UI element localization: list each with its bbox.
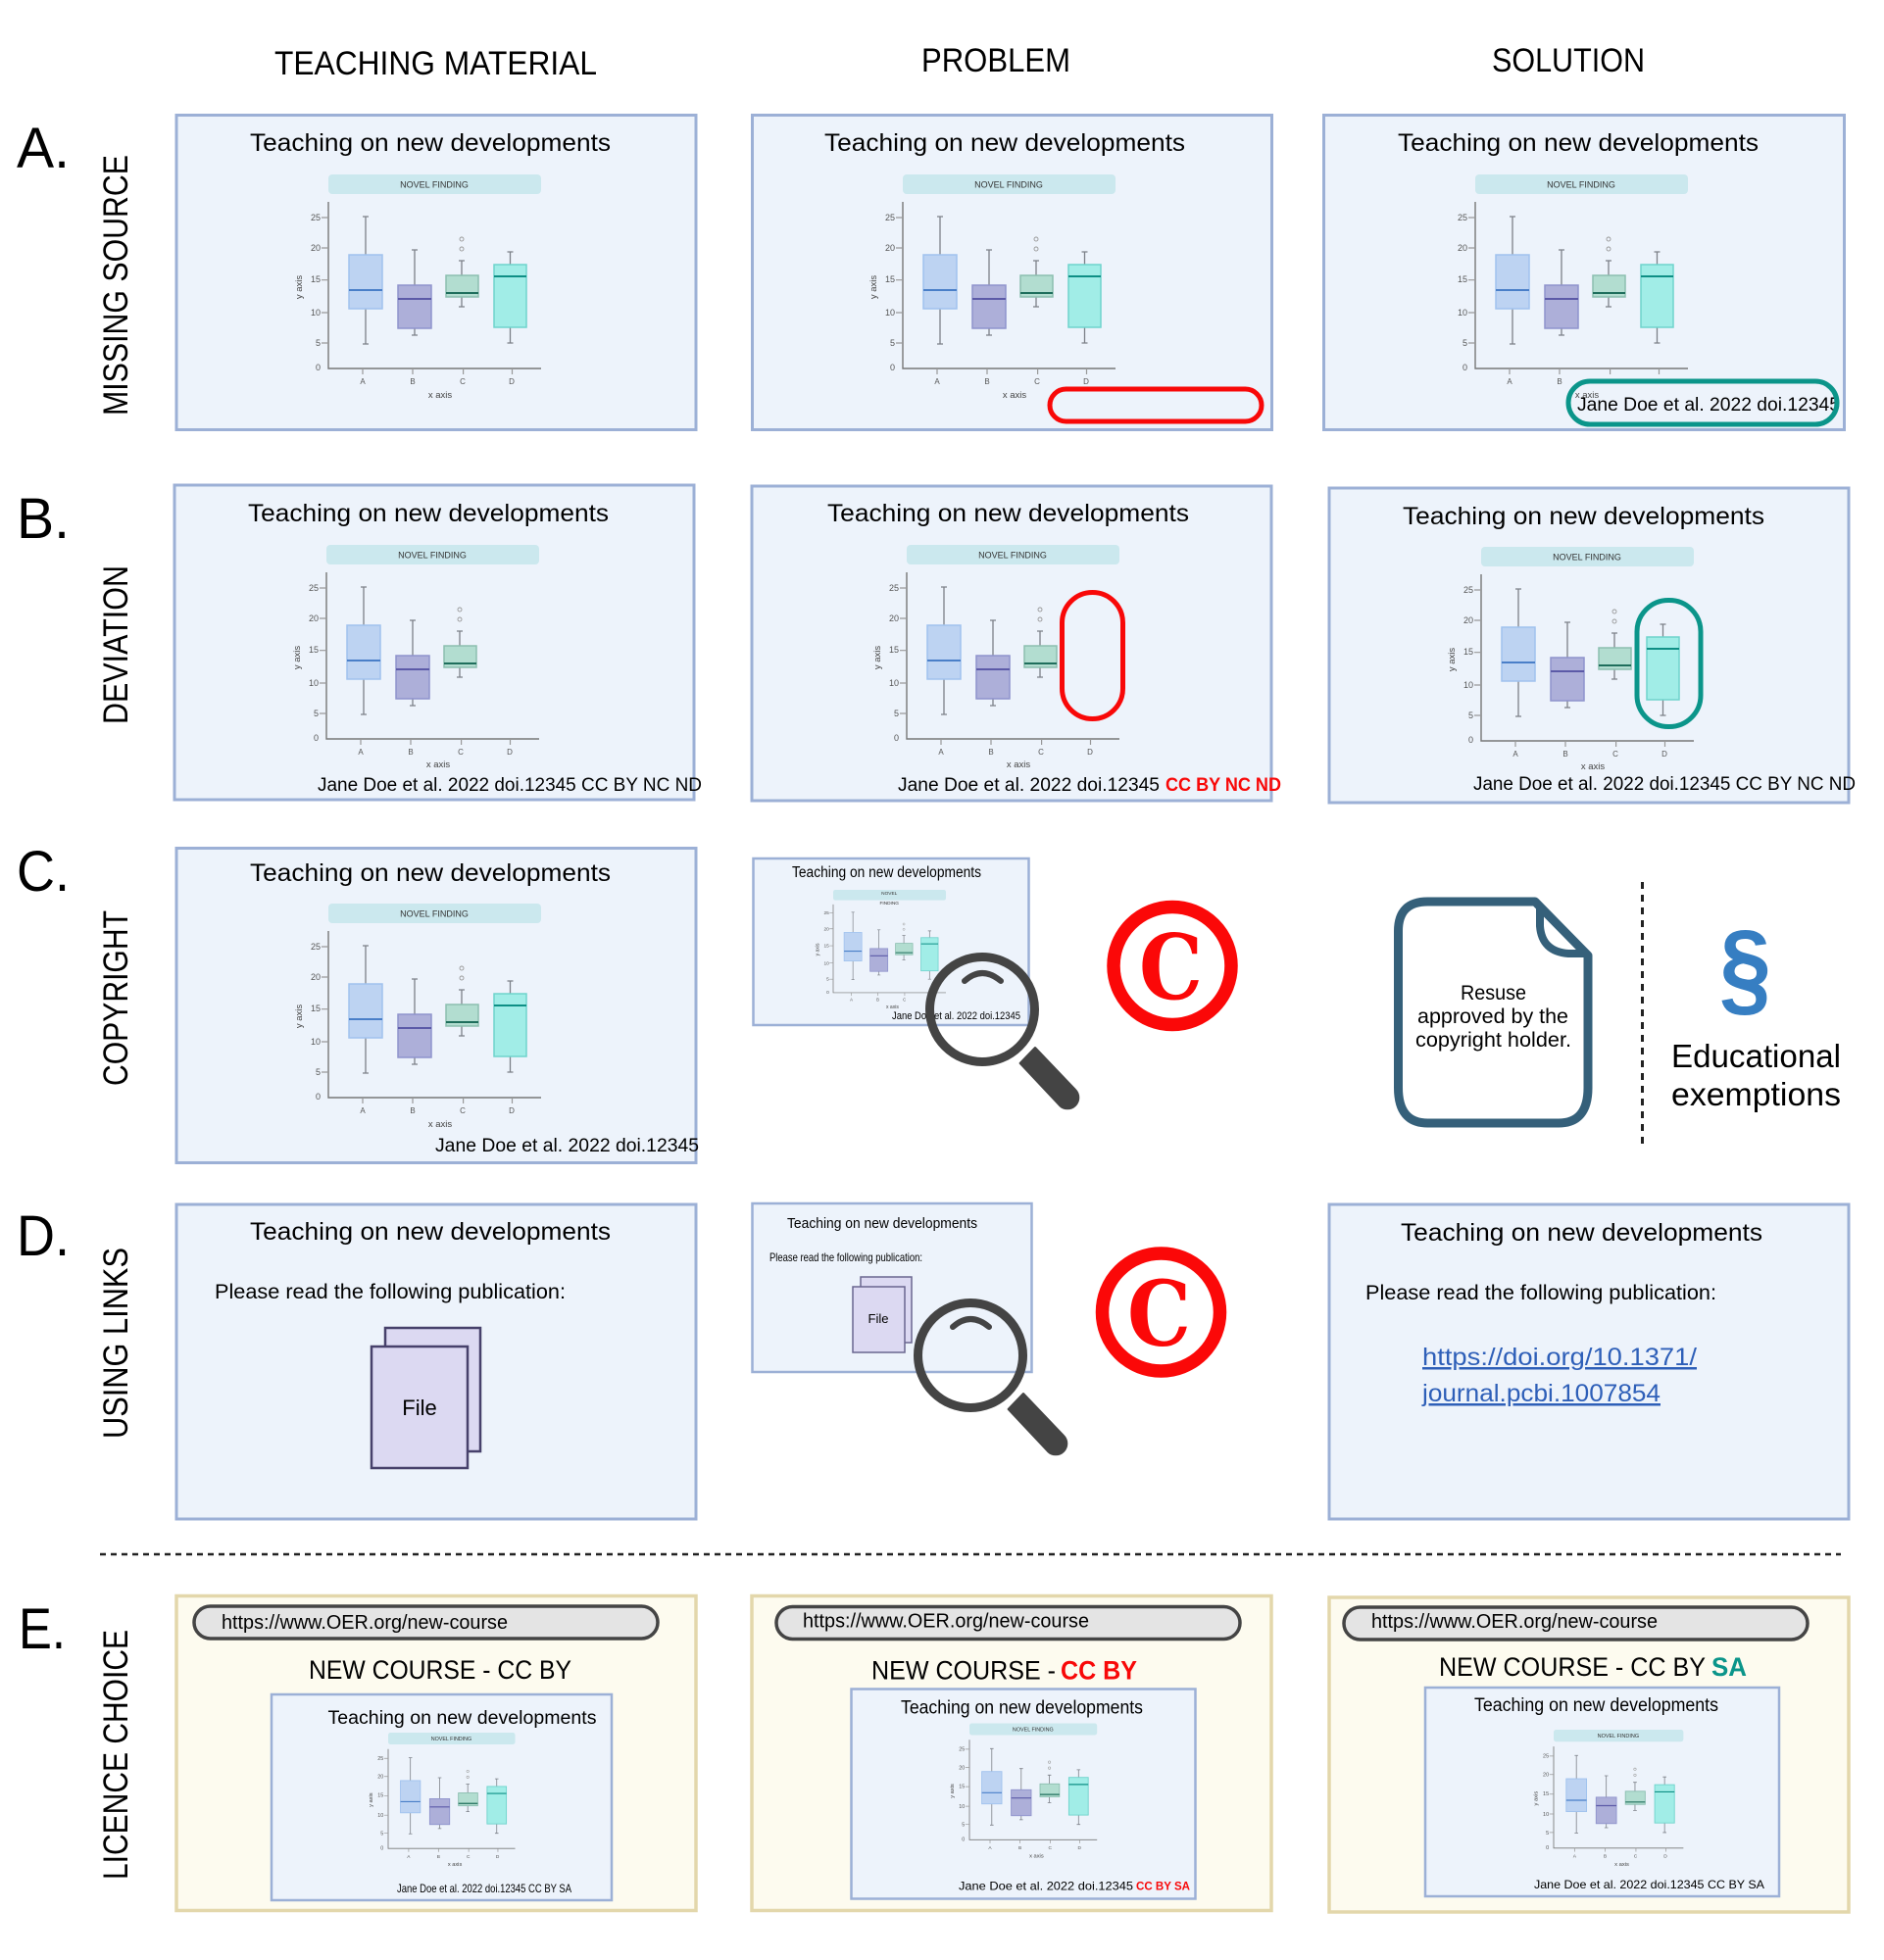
- chart: box plot A2: C: [1034, 377, 1040, 386]
- chart: small box plot: 25: [959, 1747, 965, 1753]
- chart: small box plot: D: [496, 1854, 500, 1860]
- chart: small box plot: NOVEL FINDING: [1598, 1734, 1639, 1740]
- row label: licence choice: LICENCE CHOICE: [97, 1630, 135, 1880]
- icon: approval document: [1398, 902, 1588, 1123]
- panel: D teaching material: Please read the following publication:: [215, 1281, 566, 1303]
- chart: small box plot: B: [1604, 1854, 1607, 1860]
- chart: small box plot: 0: [826, 990, 829, 996]
- column heading: problem: PROBLEM: [921, 42, 1070, 79]
- chart: small box plot: 25: [823, 910, 829, 916]
- chart: small box plot: 20: [377, 1775, 383, 1781]
- chart: box plot C1: [294, 904, 541, 1130]
- chart: small box plot: [1534, 1730, 1683, 1868]
- citation: Jane Doe et al. 2022 doi.12345: [435, 1136, 699, 1156]
- chart: box plot B2: [872, 545, 1119, 770]
- chart: small box plot: 20: [1543, 1773, 1549, 1779]
- course heading with teal licence: SA: [1711, 1652, 1747, 1682]
- chart: box plot A1: NOVEL FINDING: [400, 180, 469, 190]
- chart: box plot A1: C: [460, 377, 466, 386]
- url bar: https://www.OER.org/new-course: [1371, 1611, 1658, 1633]
- chart: box plot A2: A: [934, 377, 940, 386]
- panel: A teaching material: [176, 116, 696, 429]
- educational exemptions text: Educational: [1671, 1038, 1841, 1074]
- chart: box plot B1: [292, 545, 539, 770]
- chart: box plot A1: x axis: [428, 390, 452, 401]
- url bar: [776, 1607, 1240, 1639]
- slide thumbnail: CC BY SA: [1136, 1880, 1190, 1893]
- icon: magnifying glass D: [917, 1303, 1066, 1454]
- chart: small box plot: x axis: [1614, 1862, 1629, 1868]
- chart: box plot B3: 20: [1463, 615, 1473, 625]
- panel: C teaching material: Teaching on new developments: [250, 859, 611, 887]
- chart: small box plot: 0: [962, 1838, 965, 1843]
- chart: small box plot: x axis: [1029, 1853, 1044, 1859]
- chart: box plot B1: A: [358, 748, 364, 757]
- chart: small box plot: 10: [1543, 1812, 1549, 1818]
- chart: box plot A3: A: [1507, 377, 1512, 386]
- slide thumbnail: Jane Doe et al. 2022 doi.12345 CC BY SA: [1534, 1878, 1764, 1891]
- url bar: [194, 1606, 658, 1639]
- educational exemptions text: exemptions: [1671, 1076, 1841, 1112]
- panel: D teaching material: Teaching on new developments: [250, 1218, 611, 1246]
- chart: box plot B2: NOVEL FINDING: [978, 551, 1047, 561]
- chart: small box plot: 25: [377, 1756, 383, 1762]
- row label: copyright: COPYRIGHT: [97, 910, 135, 1086]
- educational exemptions text: [1671, 1038, 1841, 1112]
- citation with highlighted licence: Jane Doe et al. 2022 doi.12345: [898, 775, 1160, 796]
- chart: small box plot: 15: [377, 1793, 383, 1799]
- slide thumbnail: Teaching on new developments: [901, 1697, 1143, 1719]
- chart: box plot B2: B: [988, 748, 994, 757]
- slide thumbnail: [1425, 1688, 1779, 1896]
- panel: A solution: x axis: [1575, 390, 1599, 401]
- chart: small box plot: NOVEL: [881, 891, 898, 897]
- chart: small box plot: x axis: [448, 1862, 462, 1868]
- slide thumbnail: Jane Doe et al. 2022 doi.12345: [959, 1880, 1133, 1893]
- chart: box plot B2: x axis: [1007, 760, 1030, 770]
- panel: B teaching material: Teaching on new developments: [248, 500, 609, 527]
- teal oval: citation added: [1568, 381, 1837, 424]
- panel: E teaching material: [176, 1595, 696, 1911]
- chart: box plot B3: [1447, 547, 1694, 772]
- chart: box plot A2: D: [1083, 377, 1089, 386]
- chart: box plot B1: 10: [309, 678, 319, 688]
- chart: box plot B2: 25: [889, 583, 899, 593]
- chart: small box plot: A: [850, 997, 853, 1002]
- panel: C problem thumbnail: Teaching on new developments: [792, 864, 981, 881]
- icon: approval document: copyright holder.: [1415, 1029, 1571, 1052]
- chart: small box plot: NOVEL FINDING: [431, 1737, 471, 1742]
- chart: box plot B3: y axis: [1447, 648, 1458, 671]
- chart: box plot B1: D: [507, 748, 513, 757]
- column heading: solution: SOLUTION: [1492, 42, 1645, 79]
- chart: box plot A3: [1458, 174, 1688, 386]
- chart: small box plot: 10: [959, 1804, 965, 1810]
- chart: box plot B1: 25: [309, 583, 319, 593]
- chart: box plot C1: 20: [311, 972, 321, 982]
- chart: box plot A2: 25: [885, 213, 895, 222]
- chart: box plot B1: B: [408, 748, 414, 757]
- slide thumbnail: [851, 1690, 1196, 1899]
- chart: small box plot: 5: [1546, 1831, 1549, 1837]
- chart: box plot A1: 20: [311, 243, 321, 253]
- chart: box plot A3: 0: [1463, 363, 1467, 372]
- row label: using links: USING LINKS: [97, 1248, 135, 1439]
- chart: box plot A3: 10: [1458, 308, 1467, 318]
- chart: small box plot: NOVEL FINDING: [1013, 1728, 1054, 1734]
- panel: E teaching material: NEW COURSE - CC BY: [309, 1655, 571, 1685]
- chart: box plot A2: B: [984, 377, 990, 386]
- icon: copyright symbol C: [1114, 907, 1231, 1025]
- chart: small box plot: A: [988, 1845, 992, 1851]
- citation: Jane Doe et al. 2022 doi.12345 CC BY NC ND: [318, 775, 702, 796]
- chart: box plot A1: A: [360, 377, 366, 386]
- chart: small box plot: 0: [380, 1845, 383, 1851]
- chart: small box plot: FINDING: [879, 901, 899, 906]
- chart: box plot B2: 5: [894, 709, 899, 718]
- chart: box plot A2: 20: [885, 243, 895, 253]
- url bar: [1344, 1607, 1808, 1640]
- chart: small box plot: D: [929, 997, 932, 1002]
- icon: file stack: [372, 1328, 480, 1468]
- chart: box plot A3: 20: [1458, 243, 1467, 253]
- citation with highlighted licence: CC BY NC ND: [1165, 775, 1281, 796]
- icon: copyright symbol D: [1102, 1253, 1219, 1371]
- icon: small file stack: File: [868, 1311, 888, 1326]
- panel: D problem thumbnail: Please read the following publication:: [769, 1250, 922, 1264]
- chart: small box plot: 25: [1543, 1754, 1549, 1760]
- link: https://doi.org/10.1371/: [1422, 1344, 1697, 1371]
- chart: box plot C1: A: [360, 1106, 366, 1115]
- row label: deviation: DEVIATION: [97, 565, 135, 724]
- chart: box plot B1: C: [458, 748, 464, 757]
- chart: box plot B3: 0: [1468, 735, 1473, 745]
- chart: box plot B3: D: [1661, 750, 1667, 759]
- chart: box plot C1: x axis: [428, 1119, 452, 1130]
- chart: box plot C1: 25: [311, 942, 321, 952]
- panel: C teaching material: [176, 849, 699, 1162]
- chart: box plot B2: A: [938, 748, 944, 757]
- citation: Jane Doe et al. 2022 doi.12345: [892, 1010, 1020, 1022]
- chart: box plot A1: 10: [311, 308, 321, 318]
- citation with highlighted licence: [898, 775, 1281, 796]
- chart: box plot B1: 5: [314, 709, 319, 718]
- chart: box plot B3: C: [1612, 750, 1618, 759]
- chart: box plot B3: B: [1562, 750, 1568, 759]
- chart: box plot B1: 15: [309, 645, 319, 655]
- chart: box plot A1: 0: [316, 363, 321, 372]
- chart: box plot B3: 15: [1463, 647, 1473, 657]
- chart: box plot A2: NOVEL FINDING: [974, 180, 1043, 190]
- chart: box plot B1: x axis: [426, 760, 450, 770]
- chart: box plot B2: 15: [889, 645, 899, 655]
- panel: B teaching material: [174, 485, 702, 800]
- chart: box plot B2: D: [1087, 748, 1093, 757]
- slide thumbnail: Teaching on new developments: [327, 1708, 596, 1729]
- chart: small box plot: [950, 1723, 1097, 1859]
- chart: box plot A3: B: [1557, 377, 1562, 386]
- panel: D solution: [1329, 1204, 1849, 1519]
- panel: A teaching material: Teaching on new developments: [250, 129, 611, 157]
- icon: approval document: approved by the: [1417, 1005, 1568, 1028]
- link: journal.pcbi.1007854: [1421, 1380, 1661, 1407]
- chart: small box plot: 15: [1543, 1791, 1549, 1797]
- panel: A solution: [1323, 116, 1845, 429]
- panel: C problem thumbnail: [753, 858, 1029, 1025]
- chart: small box plot: 10: [377, 1813, 383, 1819]
- chart: small box plot: B: [1018, 1845, 1021, 1851]
- chart: box plot B3: A: [1512, 750, 1518, 759]
- chart: small box plot: D: [1077, 1845, 1081, 1851]
- column heading: teaching material: TEACHING MATERIAL: [274, 45, 597, 82]
- panel: D solution: Teaching on new developments: [1401, 1219, 1762, 1247]
- chart: small box plot: x axis: [886, 1004, 899, 1010]
- chart: box plot B3: x axis: [1581, 761, 1605, 772]
- chart: box plot A1: y axis: [294, 275, 305, 299]
- panel: A solution: Jane Doe et al. 2022 doi.12345: [1577, 395, 1840, 416]
- chart: small box plot: 20: [823, 926, 829, 932]
- chart: small box plot: 0: [1546, 1845, 1549, 1851]
- chart: small box plot: 5: [380, 1831, 383, 1837]
- panel: A problem: [753, 116, 1272, 429]
- citation: Jane Doe et al. 2022 doi.12345 CC BY NC ND: [1473, 774, 1856, 795]
- chart: small box plot: 5: [826, 977, 829, 983]
- chart: box plot B2: y axis: [872, 646, 883, 669]
- row letter C: C.: [17, 840, 70, 904]
- chart: box plot A1: 5: [316, 338, 321, 348]
- panel: B problem: Teaching on new developments: [827, 500, 1189, 527]
- chart: small box plot: A: [1573, 1854, 1577, 1860]
- row letter D: D.: [17, 1204, 70, 1268]
- red oval: missing citation: [1050, 389, 1262, 421]
- chart: small box plot: 5: [962, 1823, 965, 1829]
- chart: box plot A2: 0: [890, 363, 895, 372]
- chart: small box plot: y axis: [1534, 1791, 1540, 1806]
- slide thumbnail: Teaching on new developments: [1474, 1695, 1718, 1716]
- icon: small file stack: [853, 1277, 912, 1352]
- row label: missing source: MISSING SOURCE: [97, 155, 135, 416]
- panel: B solution: [1329, 488, 1856, 803]
- chart: small box plot: B: [876, 997, 879, 1002]
- chart: box plot B1: NOVEL FINDING: [398, 551, 467, 561]
- panel: A solution: Teaching on new developments: [1398, 129, 1759, 157]
- chart: box plot B3: 25: [1463, 585, 1473, 595]
- chart: small box plot: C: [467, 1854, 471, 1860]
- chart: small box plot: C: [1048, 1845, 1052, 1851]
- chart: box plot B3: 5: [1468, 710, 1473, 720]
- chart: small box plot: 15: [959, 1784, 965, 1789]
- chart: box plot A2: [868, 174, 1116, 401]
- red oval: missing group: [1063, 592, 1123, 719]
- chart: box plot A3: 15: [1458, 274, 1467, 284]
- icon: magnifying glass C: [929, 956, 1078, 1108]
- section divider: [100, 1553, 1841, 1555]
- row letter A: A.: [17, 117, 70, 180]
- chart: box plot A1: [294, 174, 541, 401]
- link: [1421, 1344, 1697, 1407]
- chart: box plot C1: B: [410, 1106, 416, 1115]
- chart: box plot B1: 0: [314, 733, 319, 743]
- chart: box plot C1: 15: [311, 1004, 321, 1013]
- chart: box plot A1: D: [509, 377, 515, 386]
- course heading with teal licence: NEW COURSE - CC BY: [1439, 1652, 1706, 1682]
- chart: box plot C1: C: [460, 1106, 466, 1115]
- icon: copyright symbol D: C: [1127, 1260, 1191, 1366]
- chart: box plot B3: NOVEL FINDING: [1553, 553, 1621, 563]
- chart: box plot A2: 5: [890, 338, 895, 348]
- chart: small box plot: y axis: [816, 943, 821, 956]
- chart: box plot B2: 0: [894, 733, 899, 743]
- row letter B: B.: [17, 487, 70, 551]
- chart: box plot C1: 10: [311, 1037, 321, 1047]
- chart: box plot A3: 5: [1463, 338, 1467, 348]
- panel: E solution: [1329, 1597, 1849, 1912]
- chart: small box plot: B: [437, 1854, 440, 1860]
- chart: small box plot: 10: [823, 960, 829, 966]
- chart: box plot C1: 5: [316, 1067, 321, 1077]
- chart: small box plot: [369, 1733, 516, 1868]
- chart: box plot A2: 10: [885, 308, 895, 318]
- panel: B solution: Teaching on new developments: [1403, 503, 1764, 530]
- teal oval: group included: [1637, 600, 1701, 727]
- chart: small box plot: D: [1663, 1854, 1667, 1860]
- chart: box plot B2: 10: [889, 678, 899, 688]
- chart: box plot B2: 20: [889, 613, 899, 623]
- icon: paragraph sign: §: [1719, 907, 1771, 1026]
- course heading with red licence: CC BY: [1061, 1656, 1137, 1686]
- panel: B problem: [752, 486, 1281, 801]
- chart: small box plot: [816, 890, 946, 1010]
- row letter E: E.: [19, 1597, 66, 1661]
- chart: small box plot: C: [903, 997, 906, 1002]
- chart: box plot A2: x axis: [1003, 390, 1026, 401]
- chart: box plot A1: 25: [311, 213, 321, 222]
- url bar: https://www.OER.org/new-course: [222, 1612, 508, 1634]
- icon: copyright symbol C: C: [1139, 914, 1203, 1020]
- url bar: https://www.OER.org/new-course: [803, 1611, 1089, 1633]
- panel: A problem: Teaching on new developments: [824, 129, 1185, 157]
- chart: small box plot: y axis: [369, 1792, 374, 1807]
- panel: D problem thumbnail: [753, 1203, 1031, 1372]
- chart: box plot B3: 10: [1463, 680, 1473, 690]
- vertical divider: [1641, 882, 1644, 1149]
- chart: box plot C1: 0: [316, 1092, 321, 1102]
- chart: small box plot: 20: [959, 1765, 965, 1771]
- icon: file stack: File: [402, 1396, 437, 1420]
- course heading with red licence: NEW COURSE -: [871, 1656, 1056, 1686]
- slide thumbnail: Jane Doe et al. 2022 doi.12345 CC BY SA: [397, 1882, 571, 1895]
- chart: box plot B1: y axis: [292, 646, 303, 669]
- chart: box plot A3: 25: [1458, 213, 1467, 222]
- chart: box plot B1: 20: [309, 613, 319, 623]
- panel: E problem: [752, 1595, 1271, 1911]
- chart: small box plot: A: [407, 1854, 411, 1860]
- chart: box plot A2: y axis: [868, 275, 879, 299]
- panel: D teaching material: [176, 1204, 696, 1519]
- slide thumbnail: [272, 1694, 612, 1900]
- chart: box plot C1: D: [509, 1106, 515, 1115]
- chart: box plot C1: NOVEL FINDING: [400, 909, 469, 919]
- icon: approval document: Resuse: [1461, 982, 1526, 1004]
- chart: small box plot: C: [1634, 1854, 1638, 1860]
- chart: box plot A1: 15: [311, 274, 321, 284]
- panel: D solution: Please read the following publication:: [1365, 1282, 1716, 1304]
- chart: box plot A2: 15: [885, 274, 895, 284]
- chart: box plot A3: NOVEL FINDING: [1547, 180, 1615, 190]
- chart: box plot C1: y axis: [294, 1004, 305, 1028]
- chart: small box plot: 15: [823, 943, 829, 949]
- chart: small box plot: y axis: [950, 1784, 956, 1798]
- chart: box plot B2: C: [1038, 748, 1044, 757]
- panel: D problem thumbnail: Teaching on new developments: [787, 1215, 977, 1232]
- chart: box plot A1: B: [410, 377, 416, 386]
